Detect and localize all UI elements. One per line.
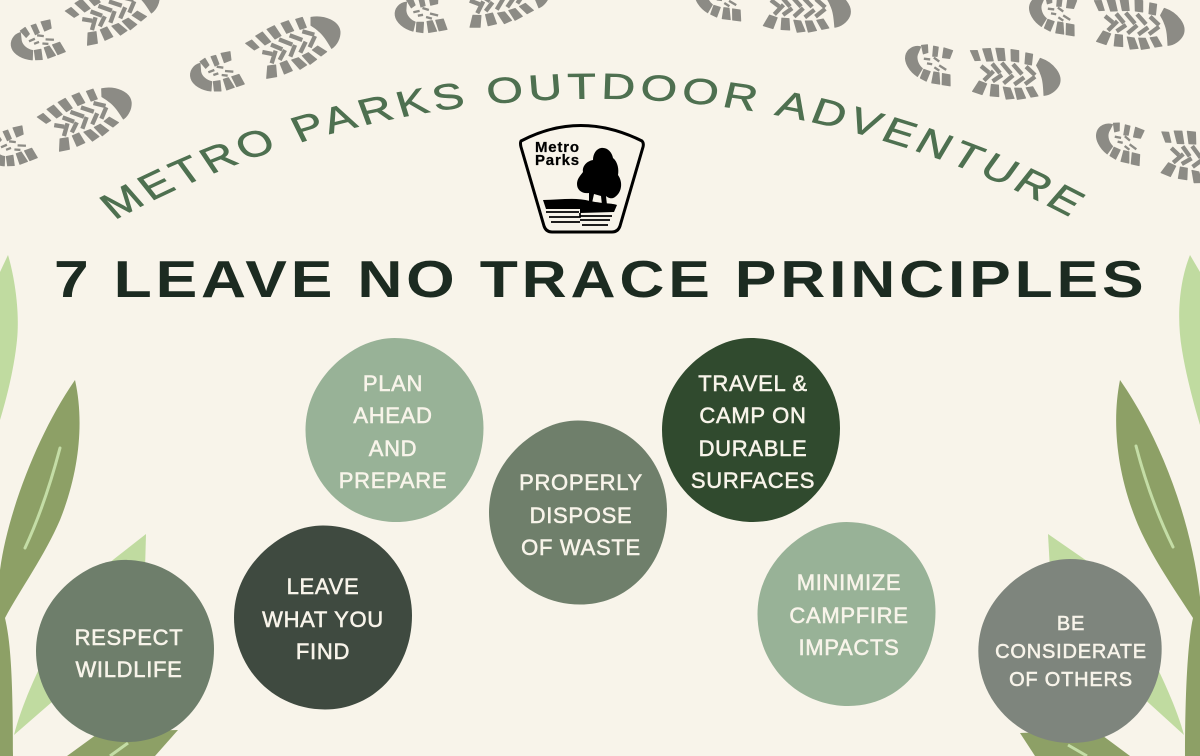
circle: Travel and Camp on Durable Surfaces: DURABLE	[699, 436, 807, 461]
circle: Be Considerate of Others	[978, 559, 1162, 743]
logo wordmark: Parks	[535, 152, 580, 169]
circle: Leave What You Find: LEAVE	[287, 574, 359, 599]
leaf vein bottom right	[1068, 745, 1087, 756]
footprint 4	[393, 0, 552, 51]
leaf vein	[25, 448, 60, 548]
circle: Minimize Campfire Impacts: IMPACTS	[798, 635, 900, 660]
logo: Metro Parks shield	[520, 126, 643, 232]
circle: Leave What You Find	[234, 526, 412, 710]
circle: Leave What You Find: WHAT YOU	[262, 607, 384, 632]
leaf vein bottom left	[110, 743, 128, 756]
logo ground	[543, 199, 617, 213]
circle: Plan Ahead and Prepare: AND	[369, 436, 417, 461]
circle: Properly Dispose of Waste	[489, 420, 667, 604]
circle: Plan Ahead and Prepare: AHEAD	[353, 403, 433, 428]
leaf: pale top left	[0, 255, 18, 420]
circle: Plan Ahead and Prepare: PLAN	[363, 371, 423, 396]
circle: Travel and Camp on Durable Surfaces	[662, 338, 840, 522]
main heading: 7 LEAVE NO TRACE PRINCIPLES	[54, 251, 1144, 309]
footprint 2	[191, 17, 340, 91]
circle: Minimize Campfire Impacts: CAMPFIRE	[789, 603, 909, 628]
circle: Properly Dispose of Waste: DISPOSE	[530, 503, 632, 528]
right plant	[1020, 255, 1200, 756]
circle: Travel and Camp on Durable Surfaces: SURFACES	[691, 468, 815, 493]
leaf: dark bottom right	[1020, 730, 1130, 756]
logo water lines	[546, 212, 612, 225]
leaf: pale lower left	[14, 534, 146, 735]
logo tree	[577, 148, 621, 205]
footprint 5	[689, 0, 856, 69]
circle: Properly Dispose of Waste: OF WASTE	[521, 535, 641, 560]
footprint 6	[899, 1, 1066, 137]
footprint 3	[0, 87, 133, 167]
circle: Plan Ahead and Prepare: PREPARE	[339, 468, 447, 493]
leaf: large right	[1116, 380, 1200, 756]
footprint 1	[9, 0, 161, 61]
circle: Properly Dispose of Waste: PROPERLY	[519, 470, 643, 495]
circle: Be Considerate of Others: OF OTHERS	[1009, 669, 1133, 691]
circle: Respect Wildlife	[36, 560, 214, 742]
leaf: pale lower right	[1048, 534, 1184, 735]
leaf: large left	[0, 380, 80, 756]
left plant	[0, 255, 178, 756]
logo wordmark: Metro	[535, 139, 580, 156]
circle: Be Considerate of Others: CONSIDERATE	[995, 641, 1147, 663]
circle: Travel and Camp on Durable Surfaces: CAMP ON	[699, 403, 807, 428]
circle: Respect Wildlife: WILDLIFE	[75, 657, 183, 682]
circle: Travel and Camp on Durable Surfaces: TRAVEL &	[698, 371, 808, 396]
leaf vein	[1136, 446, 1173, 547]
curved title: METRO PARKS OUTDOOR ADVENTURE	[99, 74, 1086, 219]
shield outline	[520, 126, 643, 232]
leaf: pale top right	[1179, 255, 1200, 425]
footprint 8	[1090, 80, 1200, 222]
footprint 7	[1023, 0, 1190, 87]
footprints trail, top	[0, 0, 1200, 222]
circle: Leave What You Find: FIND	[296, 639, 350, 664]
leaf: dark bottom left	[67, 730, 178, 756]
circle: Respect Wildlife: RESPECT	[75, 625, 183, 650]
circle: Minimize Campfire Impacts: MINIMIZE	[797, 570, 901, 595]
circle: Plan Ahead and Prepare	[306, 338, 484, 522]
circle: Minimize Campfire Impacts	[758, 522, 936, 706]
circle: Be Considerate of Others: BE	[1057, 613, 1085, 635]
